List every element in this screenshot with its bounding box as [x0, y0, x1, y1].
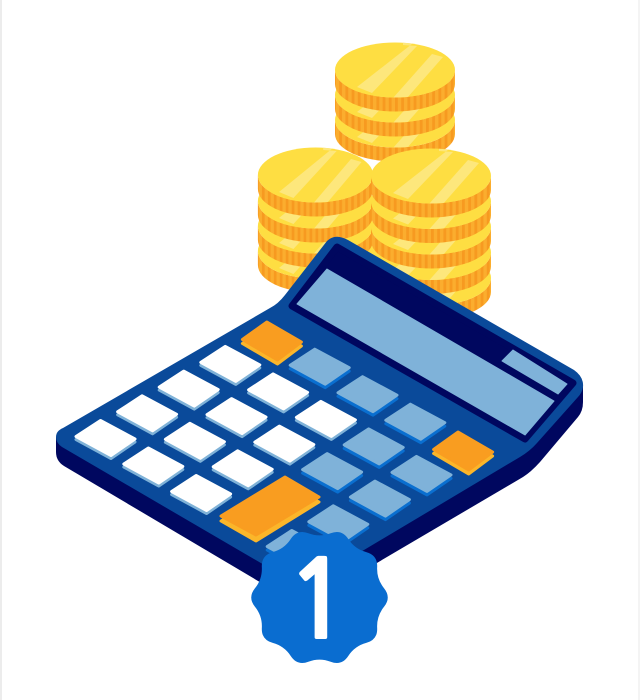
coin stack: right — [371, 146, 491, 320]
number badge — [251, 532, 388, 663]
small display — [502, 350, 567, 394]
coin stack: back — [335, 40, 455, 162]
orange keys — [242, 322, 493, 474]
badge shape — [251, 532, 388, 663]
blue keys — [267, 349, 451, 569]
wide orange key — [221, 477, 319, 541]
calculator — [56, 237, 583, 607]
calculator side depth — [56, 385, 583, 607]
badge number: 1 — [286, 548, 351, 655]
white keys — [76, 346, 355, 514]
main display — [297, 269, 554, 435]
coin stack: left — [258, 145, 373, 292]
display bezel — [292, 247, 573, 439]
calculator top face — [56, 237, 583, 587]
